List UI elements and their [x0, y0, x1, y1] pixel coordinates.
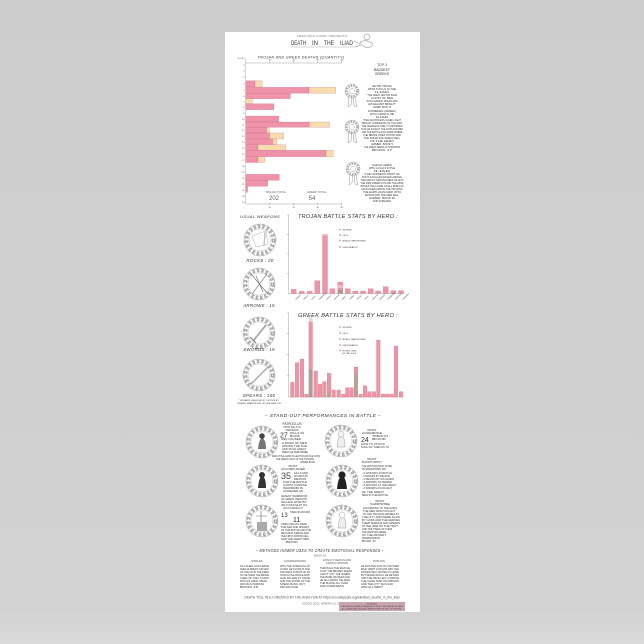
text: second hero: THE FEARLESS ONE, IT HAPPENED	[362, 124, 403, 128]
hero text 5: 11	[293, 517, 300, 524]
section heading: methods Homer uses: – METHODS HOMER USES TO CREATE EMOTIONAL RESPONSES –	[255, 548, 384, 553]
panel: usual weapons	[237, 214, 282, 405]
book numbers: 11	[242, 125, 245, 127]
text: second hero: OF THE HERO	[370, 139, 394, 143]
stacked segments	[309, 317, 358, 397]
chart: Trojan and Greek deaths: 20	[293, 60, 296, 62]
column: explicit deaths: THE BLOOD ALL OVER	[320, 581, 348, 585]
hero text 3: ACCOMPLISHED	[281, 467, 305, 471]
legend: KILLS	[342, 333, 349, 335]
hero text 1: HOMER BOOK	[300, 460, 315, 464]
hero text 1: BOOK	[290, 434, 300, 438]
hero names: Dolon	[364, 296, 369, 301]
hero text 2: HOW TO ATTACK	[361, 442, 385, 446]
legend: WOUNDS	[342, 229, 352, 231]
book numbers: 22	[242, 190, 245, 192]
hero names: Paris	[342, 296, 346, 301]
icon: rosette 2	[345, 120, 359, 143]
hero text 4: MEN IN THE BATTLE	[362, 493, 388, 497]
footer credit: GOOGLE DOCS, HOMER & CO. (UK)	[302, 602, 342, 606]
hero text 4: IN WEAPONS OF	[362, 467, 386, 471]
note box: ALL DEATHS AND WOUNDS TAKEN FROM THE TEXT OF THE EPIC	[342, 608, 403, 610]
chart: Trojan and Greek deaths: 10	[269, 60, 272, 62]
hero text 5: MEN WHO GRIEVE AND	[281, 531, 309, 535]
book numbers: 7	[243, 102, 245, 104]
book numbers: 10	[242, 119, 245, 121]
text: third hero	[360, 163, 404, 203]
footer credit: DEATH TOLL IN ILI CREATED BY THE ANALYSIS AT https://en.wikipedia.org/wiki/Iliad_deaths_in_the_iliad	[244, 596, 400, 600]
hero text 5: BOOK	[286, 540, 298, 544]
hero text 5	[281, 506, 311, 544]
column: comparisons: AND THE SOUND OF THE	[280, 579, 310, 583]
chart: Trojan and Greek deaths: BOOKS	[237, 58, 245, 60]
hero text 1: A PANIC OF MEN	[282, 441, 307, 445]
hero text 2: BOOK	[372, 437, 386, 441]
column: pathos: FATHER WHO WAITED AT HOME	[361, 570, 399, 574]
totals: 54	[309, 196, 316, 202]
hero text 1: KILLS IN	[290, 431, 304, 435]
hero text 2: COWARDICE	[362, 431, 382, 435]
hero names: Polites	[349, 294, 355, 301]
legend: HIT BUT LIVES	[342, 350, 357, 352]
hero medallion 1	[246, 426, 278, 458]
presenter line: DEAD MAN COMIC PRESENTS	[297, 34, 347, 38]
column: explicit deaths: CAST THE BRAZEN SPEAR	[320, 569, 352, 573]
hero text 1: DEEDS HE PERFORMED	[282, 450, 308, 454]
icon: rosette 1	[345, 84, 359, 107]
column: comparisons: A MAN HE FOUGHT THE	[280, 567, 310, 571]
legend: USES WEAPON	[342, 246, 358, 249]
text: second hero	[361, 109, 403, 152]
column: pathos: PATHOS	[373, 559, 385, 563]
chart: Trojan and Greek deaths: 0	[245, 60, 247, 62]
text: first hero: WITH 5 KILLS IN THE	[368, 87, 396, 91]
text: first hero: "THE GREAT HECTOR SLEW	[367, 93, 397, 97]
label: rocks: ROCKS : 20	[246, 258, 274, 263]
text: second hero: ILIAD	[376, 115, 388, 119]
chart: Trojan and Greek deaths: 40	[341, 60, 344, 62]
text: third hero: ACHILLES (GREEK)	[372, 163, 392, 167]
text: first hero	[366, 84, 398, 109]
hero text 4: - 4 DEATHS BY HIS HANDS	[362, 477, 394, 481]
hero text 4: - 2 SWORDS AS FOUGHT	[362, 486, 392, 490]
hero text 5: AND THE GREAT MEN	[281, 537, 309, 541]
hero text 3: MOST	[288, 464, 298, 468]
book numbers	[242, 65, 245, 204]
column: pathos	[361, 559, 399, 589]
hero names: Aeneas	[295, 294, 302, 301]
book numbers: 16	[242, 154, 245, 156]
column: comparisons	[280, 559, 310, 589]
text: second hero: "THE DAUNTLESS CHIEF LIGHT	[363, 118, 401, 122]
book numbers: 6	[243, 96, 245, 98]
chart: Trojan and Greek deaths: 30	[317, 60, 320, 62]
note: *SPEARS USED MOST OFTEN BY	[239, 399, 280, 402]
icon: rocks medallion	[244, 224, 276, 256]
column: pathos: HE WAS THE SON OF A MOTHER	[361, 564, 399, 568]
hero text 1: MOST KILLS IN	[284, 425, 301, 429]
book numbers: 15	[242, 148, 245, 150]
header	[291, 34, 372, 48]
column: pathos: AND ALL WEPT	[361, 585, 383, 589]
chart: Trojan and Greek deaths: 20	[293, 207, 296, 209]
hero text 5: THE WAR AND SPEARS	[281, 525, 309, 529]
book numbers: 18	[242, 166, 245, 168]
hero text 6: OF THE ANCIENT	[362, 533, 386, 537]
hero text 4: OF THE GREAT	[362, 490, 384, 494]
column: explicit deaths: THROUGH THE MAN HE	[320, 566, 350, 570]
totals: GREEK TOTAL:	[307, 190, 327, 194]
text: third hero: DRIVES THE FLAME ON ALL SIDES AS	[360, 184, 404, 188]
totals	[265, 190, 327, 202]
hero medallion 5	[246, 505, 278, 537]
hero text 1	[272, 422, 320, 464]
hero text 3: WEAPON	[294, 477, 306, 481]
legend: ATTACK THEN RETREAT	[342, 239, 367, 242]
column: explicit deaths: AND DARKNESS	[320, 584, 344, 588]
note box	[339, 602, 405, 611]
label: arrows: ARROWS : 15	[242, 303, 275, 308]
book numbers: 1	[243, 65, 245, 67]
hero text 1: PATROCLUS	[282, 422, 302, 426]
hero text 2: 24	[361, 437, 369, 444]
icon: helmet doodle	[354, 34, 372, 48]
bars: Trojan deaths (pink) and Greek deaths (cream)	[246, 81, 336, 192]
hero text 1: AND SUCH GREAT	[282, 447, 306, 451]
book numbers: 9	[243, 113, 245, 115]
chart heading: GREEK BATTLE STATS BY HERO :	[298, 313, 398, 319]
hero text 5: TIMES AND WOUNDS	[290, 510, 310, 514]
hero text 6: THE WEAPONS WERE	[362, 530, 386, 534]
hero text 3: 35	[281, 471, 291, 481]
text: first hero: HOMER, BOOK 15	[373, 105, 391, 109]
hero names: Ennomus	[395, 293, 402, 301]
book numbers: 19	[242, 172, 245, 174]
hero text 6: THEIR SHIELDS AND SPEARS	[362, 521, 400, 525]
column: explicit deaths	[320, 558, 352, 588]
hero text 2	[361, 428, 389, 449]
column: similes: SO HE SLEW THE BRAVE	[240, 573, 269, 577]
icon: arrows medallion	[243, 268, 275, 300]
column: comparisons: AND WAS DONE	[280, 585, 298, 589]
hero text 1: THE GREAT FIGHT OF THE TROJANS	[276, 457, 314, 461]
hero names: Sarpedon	[402, 293, 410, 301]
column: pathos: AND THE WIFE LEFT A WIDOW	[361, 576, 399, 580]
column: similes: WHEN HE BREAKS THE NECK	[240, 567, 269, 571]
column: comparisons: TROJANS IN BATTLE AS	[280, 570, 310, 574]
column: similes: SIMILES	[251, 559, 263, 563]
text: third hero: HOMER, BOOK 20	[369, 196, 396, 200]
column: comparisons: SPEAR RANG OUT	[280, 582, 305, 586]
note box: THE ILIAD BY HOMER, A TRANSLATION BY A. T. MURRAY AND A. LANG	[341, 605, 403, 608]
hero text 5: 13	[281, 513, 288, 519]
column: comparisons: COMPARISONS	[284, 559, 306, 563]
hero names: Hector	[326, 294, 332, 301]
hero text 3: 30 FOUGHT IN	[281, 503, 307, 507]
hero text 5: TIMES USED HIS SPEAR	[281, 522, 307, 526]
book numbers: 21	[242, 184, 245, 186]
title	[291, 40, 353, 47]
icon: spears medallion	[243, 359, 275, 391]
hero text 6: WARRIORS	[362, 536, 380, 540]
label: swords: SWORDS : 19	[243, 347, 275, 352]
title: ILIAD	[340, 40, 353, 47]
hero names: Deiphobus	[319, 293, 327, 301]
hero names: Agenor	[303, 294, 310, 301]
book numbers: 14	[242, 142, 245, 144]
hero text 1: DIED AT THE HAND OF HECTOR AND THE GODS	[272, 454, 320, 458]
column: explicit deaths: AND IT CUT THE SINEW	[320, 572, 350, 576]
legend	[339, 326, 367, 355]
chart heading: TROJAN AND GREEK DEATHS (QUANTITY)	[258, 56, 344, 60]
note: GREEK WARRIORS IN THE BATTLE	[237, 402, 282, 405]
icon: rosette 3	[346, 162, 360, 185]
column: pathos: BUT NEVER WOULD HE RETURN	[361, 573, 399, 577]
text: third hero: THE EARTH RAN DARK WITH	[363, 190, 401, 194]
book numbers: 24	[242, 202, 245, 204]
hero text 6: IN THE TROJAN ARMIES AT	[363, 512, 399, 516]
column: explicit deaths: THE BONE CRUSHED AND	[320, 575, 350, 579]
hero text 6: SURPRISE	[370, 502, 390, 506]
hero text 4: - 5 SPEARS BY WEAPON	[362, 474, 390, 478]
bars	[291, 234, 404, 294]
text: second hero: AND THE BATTLE FOLLOWED WHERE	[362, 130, 403, 134]
column: similes: AS A SLEEK LION FIERCE	[240, 564, 269, 568]
title: IN	[312, 40, 318, 47]
text: second hero: THAT HE FOUGHT THE GODS AND MEN	[361, 127, 403, 131]
hero text 3	[281, 464, 308, 507]
text: first hero: HECTOR (TROJAN)	[372, 84, 392, 88]
legend: USES WEAPON	[342, 344, 358, 347]
hero text 6: THE MEN WHO FOUGHT	[363, 509, 395, 513]
text: second hero: BRIGHT COMPANION OF THE WAR	[362, 121, 402, 125]
book numbers: 4	[243, 84, 245, 86]
legend: WOUNDS	[342, 327, 352, 329]
icon: swords medallion	[243, 317, 275, 349]
hero text 3: GREAT WARRIOR	[281, 494, 307, 498]
text: third hero: THE FIRE SWEEPS ON AND THE WIND	[360, 181, 404, 185]
column: similes: WITH HIS GREAT SPEAR	[240, 579, 267, 583]
text: second hero: THE SPEAR AND SHIELD FELL	[364, 136, 400, 140]
totals: 202	[269, 196, 280, 202]
panel heading: TOP 3	[377, 63, 387, 67]
hero medallion 4	[326, 465, 358, 497]
hero text 2: TIMES IN	[372, 434, 388, 438]
text: second hero: THE GREAT DEEDS OF WARRIORS	[364, 145, 400, 149]
hero text 4: - 6 WOUNDS IN BATTLE	[362, 471, 392, 475]
panel: top 3 baddest: BADDEST	[374, 68, 390, 72]
hero names: Helenus	[334, 294, 340, 301]
heading: USUAL WEAPONS	[240, 214, 280, 219]
hero text 6: ACCORDING TO THE GODS	[363, 506, 397, 510]
column: similes	[240, 559, 269, 589]
text: third hero: BLOOD AND THE MEN FELL	[365, 193, 399, 197]
legend: BY THE GODS	[342, 353, 357, 355]
chart: Trojan and Greek deaths	[237, 56, 344, 209]
hero text 6: MOST	[376, 499, 385, 503]
text: third hero: THE FOES AS THROUGH DEEP VALLEYS	[360, 178, 404, 182]
book numbers: 3	[243, 77, 245, 79]
hero text 6: BOOK 21	[362, 539, 377, 543]
hero text 2: MOST	[368, 428, 377, 432]
chart: Trojan battle stats by hero	[287, 214, 410, 301]
chart: Trojan and Greek deaths: 40	[341, 207, 344, 209]
hero text 1: AND CAUSED	[281, 437, 301, 441]
text: third hero: "THE GODDESS SWIFT OF	[364, 172, 400, 176]
column: comparisons: WITH THE STRENGTH OF	[280, 564, 310, 568]
hero text 4: THE MOST AND MOST OFTEN	[362, 464, 392, 468]
hero text 4: - 3 ARROWS TO DEFEND	[362, 480, 392, 484]
chart: Trojan and Greek deaths: 30	[317, 207, 320, 209]
hero text 3: WOUNDS BY	[294, 474, 308, 478]
column: explicit deaths: EXPLICIT DEATHS AND	[323, 558, 351, 562]
chart: Greek battle stats by hero	[287, 313, 404, 397]
hero names: Polydamas	[387, 292, 396, 301]
chart: Trojan and Greek deaths: 10	[269, 207, 272, 209]
hero text 6: BY GODS AND THE HEROES	[362, 518, 400, 522]
text: third hero: WITH 24 KILLS IN THE	[369, 166, 395, 170]
hero text 3: KILLS AND	[294, 471, 308, 475]
hero text 1: 27	[280, 432, 288, 440]
title: DEATH	[291, 40, 306, 47]
text: first hero: A HOST OF MEN	[371, 96, 393, 100]
column: pathos: THE CHILD NOW AN ORPHAN	[361, 579, 399, 583]
text: second hero: THE BRAVE ONES STOOD AND	[363, 133, 401, 137]
hero text 4: MOST	[368, 457, 377, 461]
panel: methods columns	[240, 558, 399, 589]
panel: stand-out performances	[246, 422, 400, 544]
hero text 3: FOR THE BATTLE	[283, 480, 307, 484]
text: third hero: FOOT ACHILLES RAGED AMONG	[362, 175, 402, 179]
hero text 2: SUCH OF THEM AS TO	[361, 445, 389, 449]
footer credit	[244, 596, 400, 606]
hero text 6: IN THE WAR OF THE TROY	[362, 524, 398, 528]
hero text 5: THE FIRST ARROW FELL	[281, 534, 309, 538]
book numbers: 2	[243, 71, 245, 73]
book numbers: 5	[243, 90, 245, 92]
text: first hero: HIS HELMET BRIGHT"	[368, 102, 396, 106]
book numbers: 12	[242, 130, 245, 132]
column: explicit deaths: GRAPHIC WOUNDS	[326, 561, 348, 565]
hero names: Acamas	[379, 293, 386, 301]
column: similes: OF THE OX IN THE HERD	[240, 570, 269, 574]
label: spears: SPEARS : 100	[243, 393, 275, 398]
column: similes: CHIEF OF THE LYCIANS	[240, 576, 269, 580]
totals: TROJAN TOTAL:	[265, 190, 287, 194]
text: third hero: ILIAD	[374, 169, 390, 173]
hero text 6: AND THE TIMES OF THEM	[362, 527, 393, 531]
hero names: Asius	[311, 295, 316, 301]
legend	[339, 228, 367, 249]
hero medallion 2	[325, 425, 357, 457]
text: first hero: WITH SHINING SPEAR AND	[366, 99, 398, 103]
hero text 4: BLOODTHIRSTY	[362, 460, 382, 464]
column: similes: AND MUCH SORROW	[240, 582, 264, 586]
hero text 4: - 8 WOUNDS AT THE GREAT	[362, 483, 396, 487]
panel: top 3 baddest: GREEKS	[375, 72, 390, 76]
text: second hero: BOOK 17	[372, 148, 393, 152]
hero text 1: AMONG THE FOE	[282, 444, 307, 448]
panel: top 3 baddest	[345, 63, 404, 203]
text: third hero: HE RUSHED AMONG THE TROJANS	[362, 187, 403, 191]
text: second hero: WITH A SPEAR IN THE	[370, 112, 394, 116]
legend: ATTACK THEN RETREAT	[342, 338, 367, 341]
hero text 3: ACHIEVED AS	[283, 489, 303, 493]
hero medallion 3	[246, 465, 278, 497]
book numbers: 23	[242, 196, 245, 198]
hero text 1: ONE BOOK	[286, 428, 299, 432]
section heading: methods Homer uses	[255, 548, 384, 558]
note box: SOURCES	[367, 604, 378, 606]
hero text 5: ACCURACY	[283, 506, 303, 510]
chart heading: TROJAN BATTLE STATS BY HERO :	[298, 214, 398, 220]
legend: KILLS	[342, 235, 349, 237]
bars	[290, 322, 403, 397]
text: second hero: DIOMEDES (GREEK)	[368, 109, 396, 113]
hero names: Glaucus	[372, 294, 379, 301]
hero text 5: OF THE BATTLE AND THE	[281, 528, 311, 532]
hero text 6	[362, 499, 400, 543]
hero text 3: A MOST CUNNING	[283, 483, 307, 487]
hero text 3: KILLED AND BY	[281, 500, 307, 504]
section heading: methods Homer uses: BOOK 16	[314, 554, 326, 558]
stacked segments	[322, 234, 343, 294]
book numbers: 8	[243, 107, 245, 109]
book numbers: 13	[242, 136, 245, 138]
hero names	[295, 292, 410, 301]
poster sheet	[225, 32, 420, 612]
book numbers: 17	[242, 160, 245, 162]
hero medallion 6	[326, 505, 358, 537]
text: second hero: HOMER, BOOK 5	[371, 142, 394, 146]
column: explicit deaths: HE FELL AMONG THE DEAD	[320, 578, 350, 582]
text: first hero: ILIAD	[375, 90, 389, 94]
title: THE	[324, 40, 335, 47]
book numbers: 20	[242, 178, 245, 180]
section heading: stand-out performances: – STAND-OUT PERFORMANCES IN BATTLE –	[264, 413, 381, 418]
column: pathos: WHO WEPT FOR HIM AND THE	[361, 567, 399, 571]
note	[237, 399, 282, 405]
hero text 3: WARRIOR IS	[283, 486, 303, 490]
column: comparisons: HAD FALLEN AT ONCE	[280, 576, 310, 580]
hero text 4	[362, 457, 396, 497]
column: pathos: AND THE CITY WAS SAD	[361, 582, 393, 586]
hero text 6: THE CITY AND WERE SLAIN	[362, 515, 400, 519]
hero text 3: OF GREAT WEAPON	[281, 497, 307, 501]
text: third hero: AND FOREVER	[373, 199, 391, 203]
column: similes: BOOK 16	[240, 585, 259, 589]
column: comparisons: THOUGH THE WHOLE ARMY	[280, 573, 310, 577]
hero names: Pyrrus	[357, 295, 362, 301]
